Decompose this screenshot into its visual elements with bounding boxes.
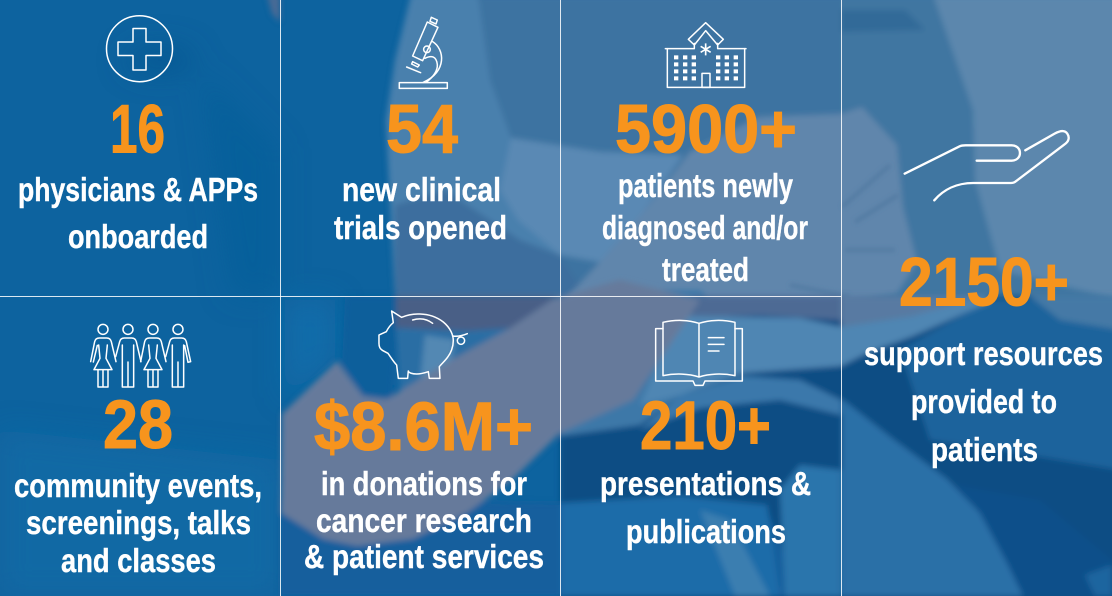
label: community events, screenings, talks and classes: community events, xyxy=(14,467,262,504)
label: in donations for cancer research & patient services xyxy=(304,465,544,575)
blanket cuff xyxy=(500,138,683,262)
icon: microscope xyxy=(399,17,447,88)
number: $8.6M+: $8.6M+ xyxy=(314,388,533,465)
lower right legs xyxy=(560,296,1112,596)
icon: open hand xyxy=(905,131,1069,200)
label: new clinical trials opened xyxy=(334,171,507,246)
label: support resources provided to patients xyxy=(864,335,1103,468)
number: 28: 28 xyxy=(103,386,173,463)
label: new clinical trials opened: new clinical xyxy=(342,171,501,208)
label: community events, screenings, talks and classes xyxy=(14,467,262,579)
label: patients newly diagnosed and/or treated: patients newly xyxy=(618,167,793,204)
icon: four people xyxy=(91,324,191,387)
label: physicians & APPs onboarded: physicians & APPs xyxy=(18,171,258,208)
panel: donations xyxy=(304,311,544,575)
clasped hands xyxy=(559,107,917,306)
lower slate shadow xyxy=(396,296,560,331)
label: support resources provided to patients: patients xyxy=(931,431,1038,468)
patient sweater and sleeve xyxy=(386,0,1112,300)
number: 54: 54 xyxy=(386,90,458,168)
panel: support resources xyxy=(864,131,1103,468)
panel: community events xyxy=(14,324,262,579)
panel: physicians & APPs xyxy=(18,16,258,255)
icon: medical cross in circle xyxy=(106,16,172,82)
number: 5900+: 5900+ xyxy=(615,90,797,168)
label: presentations & publications xyxy=(600,465,811,550)
label: support resources provided to patients: provided to xyxy=(911,383,1057,420)
label: presentations & publications: presentations & xyxy=(600,465,811,502)
panel: clinical trials xyxy=(334,17,507,246)
label: in donations for cancer research & patient services: & patient services xyxy=(304,538,544,575)
forearm xyxy=(281,280,700,546)
panel: patients diagnosed xyxy=(602,23,808,288)
panel: presentations & publications xyxy=(600,320,811,550)
label: patients newly diagnosed and/or treated: diagnosed and/or xyxy=(602,209,808,246)
label: in donations for cancer research & patient services: in donations for xyxy=(321,465,527,502)
patient arm and bed xyxy=(841,0,1112,330)
label: physicians & APPs onboarded xyxy=(18,171,258,255)
icon: piggy bank xyxy=(379,311,467,378)
label: presentations & publications: publications xyxy=(626,513,786,550)
label: physicians & APPs onboarded: onboarded xyxy=(68,218,208,255)
number: 2150+: 2150+ xyxy=(899,244,1069,320)
label: patients newly diagnosed and/or treated: treated xyxy=(662,251,749,288)
number: 16: 16 xyxy=(110,90,165,168)
grid lines xyxy=(0,0,842,596)
label: community events, screenings, talks and classes: and classes xyxy=(61,542,216,579)
label: in donations for cancer research & patient services: cancer research xyxy=(316,502,532,539)
icon: open book xyxy=(656,320,742,385)
icon: hospital building xyxy=(665,23,746,87)
label: new clinical trials opened: trials opened xyxy=(334,209,507,246)
label: community events, screenings, talks and classes: screenings, talks xyxy=(26,504,251,541)
number: 210+: 210+ xyxy=(640,387,771,464)
label: patients newly diagnosed and/or treated xyxy=(602,167,808,288)
